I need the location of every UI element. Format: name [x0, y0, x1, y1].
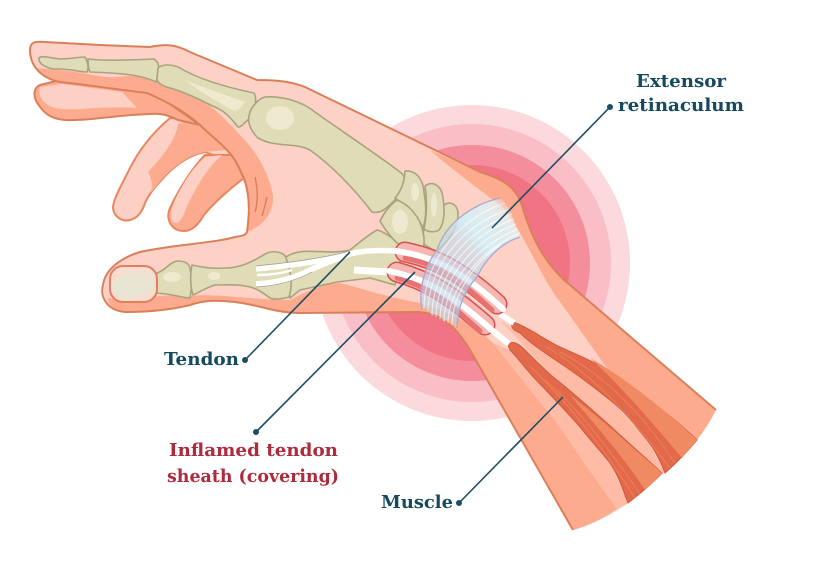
hand outline	[30, 42, 716, 530]
finger: little finger, curled	[168, 155, 244, 231]
ring finger shadow	[148, 118, 228, 193]
inflamed sheath: lower	[389, 271, 493, 331]
index finger bones	[39, 57, 405, 213]
lower muscle belly	[508, 343, 662, 503]
bone highlights	[163, 80, 437, 282]
tendons in thumb	[256, 250, 395, 284]
muscles	[508, 322, 697, 503]
finger: ring finger, curled	[113, 118, 240, 220]
middle finger highlight	[39, 84, 137, 109]
upper muscle stripes	[545, 346, 675, 468]
extensor retinaculum band	[421, 198, 520, 328]
leader line: muscle	[456, 397, 563, 506]
upper muscle fibres	[590, 358, 697, 458]
leader line: inflamed tendon sheath	[253, 272, 415, 435]
label: tendon: Tendon	[164, 349, 239, 370]
retinaculum edges	[421, 198, 520, 328]
leader line: tendon	[242, 252, 350, 363]
label: inflamed tendon sheath: sheath (covering)	[167, 466, 339, 487]
forearm lighter centre	[500, 320, 666, 475]
retinaculum fibres	[424, 203, 520, 325]
label: inflamed tendon sheath	[167, 440, 339, 487]
thumb bones	[153, 252, 291, 299]
inflammation glow circles	[314, 105, 630, 421]
upper muscle belly	[512, 322, 697, 473]
finger: middle finger, behind index	[34, 80, 200, 125]
label: inflamed tendon sheath: Inflamed tendon	[169, 440, 338, 461]
shading: thumb underside	[108, 283, 573, 530]
label: muscle: Muscle	[381, 492, 453, 513]
inflamed sheath: upper	[396, 251, 503, 310]
little finger highlight	[171, 155, 222, 223]
leader line: extensor retinaculum	[492, 104, 613, 228]
shading: index finger underside and palm	[36, 68, 273, 232]
forearm lower centre	[493, 343, 628, 509]
label: extensor retinaculum: retinaculum	[618, 95, 744, 116]
shading: forearm right band	[430, 150, 716, 440]
label: extensor retinaculum	[618, 71, 744, 116]
thumb nail	[110, 266, 157, 302]
forearm and hand silhouette	[30, 42, 716, 530]
lower muscle fibres	[570, 395, 662, 490]
palm crease lines	[255, 177, 267, 216]
tendon outlines	[256, 251, 350, 287]
lower muscle stripes	[530, 366, 640, 498]
tendon stubs to muscles	[493, 314, 514, 344]
wrist carpal bones	[285, 171, 458, 298]
shading: forearm left band	[420, 303, 617, 530]
label: extensor retinaculum: Extensor	[636, 71, 727, 92]
